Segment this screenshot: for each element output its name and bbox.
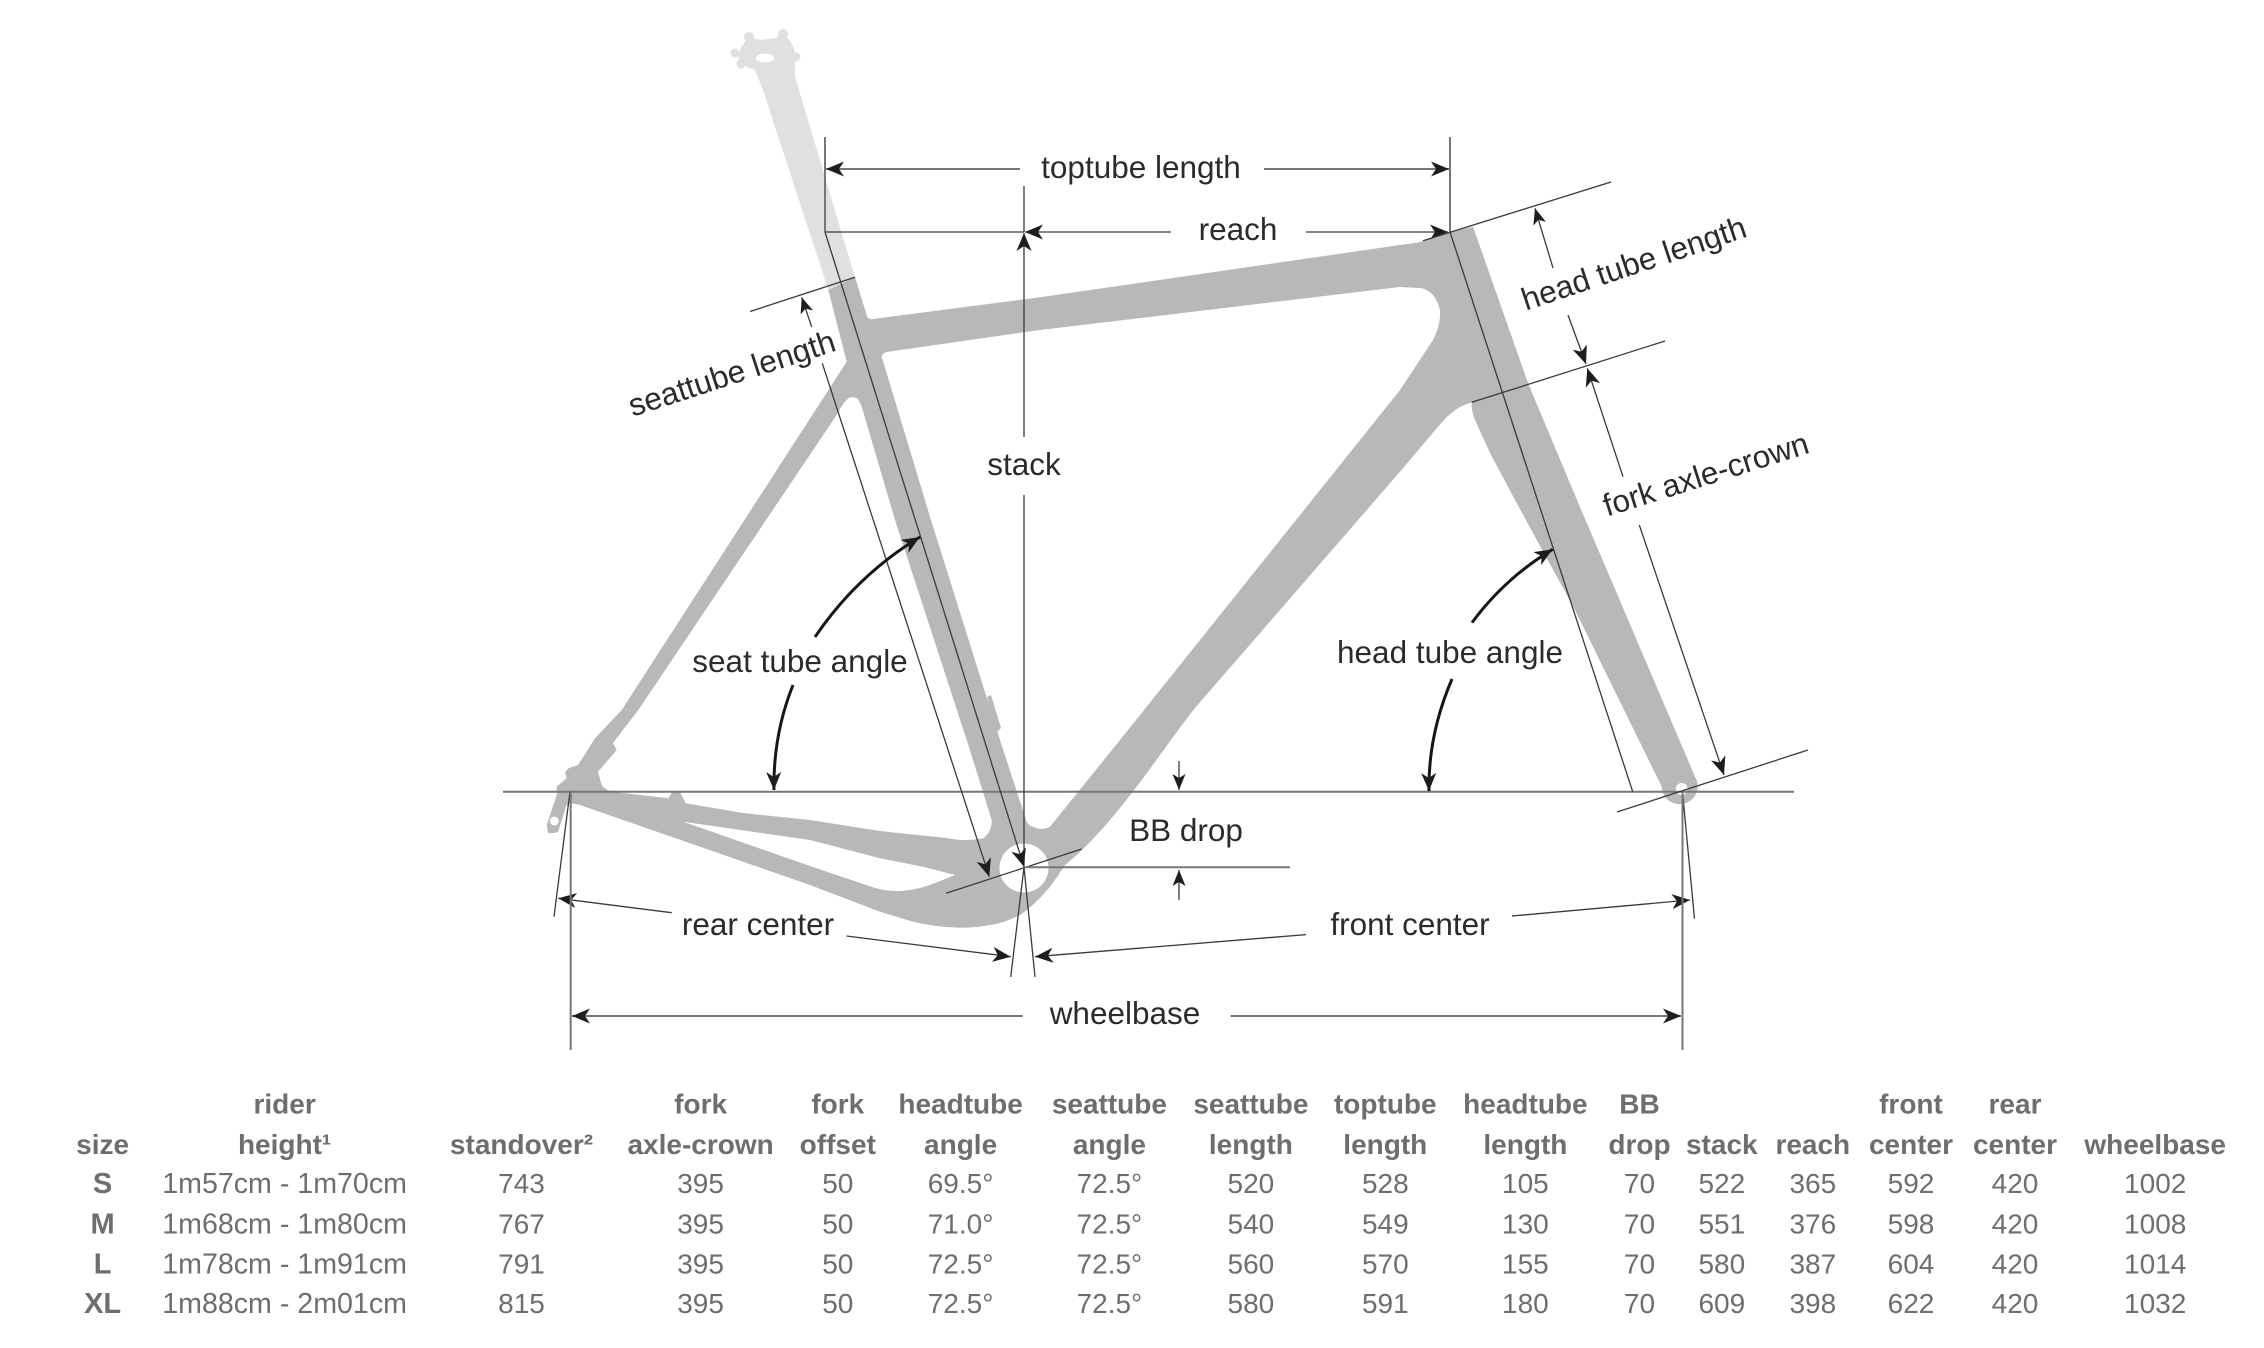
dimension: fork axle-crown: [1472, 341, 1813, 812]
row L: 560: [1228, 1248, 1274, 1279]
row M: 1008: [2124, 1209, 2186, 1240]
row S: 592: [1888, 1168, 1934, 1199]
table header: center: [1869, 1129, 1953, 1160]
row M: 420: [1992, 1209, 2038, 1240]
row L: 72.5°: [1077, 1248, 1142, 1279]
dimension: wheelbase: wheelbase: [1049, 995, 1200, 1031]
table header: length: [1343, 1129, 1427, 1160]
row M: 376: [1789, 1209, 1836, 1240]
table header: angle: [1073, 1129, 1146, 1160]
frame and fork silhouette: [547, 227, 1698, 928]
row XL: 420: [1992, 1288, 2038, 1319]
row M: 549: [1362, 1209, 1409, 1240]
table header: length: [1209, 1129, 1293, 1160]
dimension: reach: reach: [1199, 211, 1277, 247]
dimension: front center: [1024, 792, 1694, 977]
dimension: fork axle-crown: fork axle-crown: [1598, 425, 1813, 523]
row S: 1m57cm - 1m70cm: [162, 1168, 407, 1200]
table header: height¹: [238, 1129, 331, 1160]
row M: [91, 1209, 2186, 1241]
row S: 50: [822, 1168, 853, 1199]
row L: 570: [1362, 1248, 1409, 1279]
row M: 71.0°: [928, 1209, 993, 1240]
row XL: 580: [1228, 1288, 1274, 1319]
row XL: 609: [1698, 1288, 1745, 1319]
row L: 155: [1502, 1248, 1549, 1279]
dimension: toptube length: toptube length: [1041, 149, 1241, 185]
row M: 70: [1624, 1209, 1655, 1240]
row S: 395: [677, 1168, 724, 1199]
geometry table: [76, 1089, 2226, 1320]
seatpost and saddle clamp: [730, 29, 855, 290]
row M: 50: [822, 1209, 853, 1240]
row L: [94, 1248, 2186, 1280]
row L: 1014: [2124, 1248, 2186, 1279]
table header: headtube: [898, 1089, 1023, 1120]
table header: axle-crown: [627, 1129, 774, 1160]
row S: 365: [1789, 1168, 1836, 1199]
row L: L: [94, 1248, 111, 1280]
table header: center: [1973, 1129, 2057, 1160]
table header: [76, 1089, 2226, 1160]
table header: headtube: [1463, 1089, 1588, 1120]
row XL: XL: [84, 1288, 121, 1320]
table header: stack: [1686, 1129, 1758, 1160]
dimension: rear center: rear center: [682, 906, 834, 942]
table header: rear: [1989, 1089, 2042, 1120]
diagram: bicycle frame geometry: [503, 29, 1813, 1050]
dimension: head tube angle: head tube angle: [1337, 634, 1563, 670]
table header: seattube: [1193, 1089, 1308, 1120]
row L: 70: [1624, 1248, 1655, 1279]
table header: fork: [811, 1089, 865, 1120]
dimension: toptube length: [825, 137, 1450, 232]
row L: 420: [1992, 1248, 2038, 1279]
row XL: 398: [1789, 1288, 1836, 1319]
table header: wheelbase: [2083, 1129, 2226, 1160]
row M: 598: [1888, 1209, 1934, 1240]
row S: S: [93, 1168, 112, 1200]
row M: 1m68cm - 1m80cm: [162, 1209, 407, 1241]
row XL: 395: [677, 1288, 724, 1319]
row S: 70: [1624, 1168, 1655, 1199]
row S: 1002: [2124, 1168, 2186, 1199]
row L: 604: [1888, 1248, 1934, 1279]
table header: front: [1879, 1089, 1943, 1120]
dimension: seattube length: seattube length: [624, 323, 840, 423]
row XL: [84, 1288, 2186, 1320]
table header: size: [76, 1129, 129, 1160]
table header: offset: [800, 1129, 876, 1160]
row S: 528: [1362, 1168, 1409, 1199]
row XL: 622: [1888, 1288, 1934, 1319]
table header: seattube: [1052, 1089, 1167, 1120]
table header: reach: [1775, 1129, 1850, 1160]
row XL: 70: [1624, 1288, 1655, 1319]
row M: M: [91, 1209, 115, 1241]
dimension: stack: stack: [987, 446, 1061, 482]
row S: 522: [1698, 1168, 1745, 1199]
row L: 791: [498, 1248, 545, 1279]
row XL: 50: [822, 1288, 853, 1319]
dimension: BB drop: BB drop: [1129, 812, 1243, 848]
dimension: head tube length: head tube length: [1517, 209, 1751, 317]
table header: angle: [924, 1129, 997, 1160]
row XL: 1032: [2124, 1288, 2186, 1319]
table header: fork: [674, 1089, 727, 1120]
dimension: head tube length: [1423, 182, 1751, 792]
row S: 743: [498, 1168, 545, 1199]
dimension: seat tube angle: [692, 537, 920, 790]
row XL: 591: [1362, 1288, 1409, 1319]
row S: 69.5°: [928, 1168, 993, 1199]
row XL: 180: [1502, 1288, 1549, 1319]
baseline: [503, 791, 1794, 793]
table header: drop: [1608, 1129, 1671, 1160]
dimension: wheelbase: [571, 792, 1683, 1050]
row L: 580: [1698, 1248, 1745, 1279]
table header: standover²: [450, 1129, 593, 1160]
row M: 395: [677, 1209, 724, 1240]
row L: 50: [822, 1248, 853, 1279]
row L: 1m78cm - 1m91cm: [162, 1248, 407, 1280]
row M: 767: [498, 1209, 545, 1240]
row L: 395: [677, 1248, 724, 1279]
row S: 420: [1992, 1168, 2038, 1199]
row S: 72.5°: [1077, 1168, 1142, 1199]
row M: 72.5°: [1077, 1209, 1142, 1240]
row S: 105: [1502, 1168, 1549, 1199]
dimension: front center: front center: [1330, 906, 1490, 942]
dimension: head tube angle: [1337, 549, 1563, 791]
row XL: 72.5°: [928, 1288, 993, 1319]
row S: 520: [1228, 1168, 1274, 1199]
table header: toptube: [1334, 1089, 1437, 1120]
row M: 551: [1698, 1209, 1745, 1240]
row L: 72.5°: [928, 1248, 993, 1279]
frame details: [668, 695, 1001, 804]
row M: 540: [1228, 1209, 1274, 1240]
table header: length: [1483, 1129, 1567, 1160]
table header: BB: [1619, 1089, 1660, 1120]
row XL: 1m88cm - 2m01cm: [162, 1288, 407, 1320]
bottom bracket and dropout holes: [550, 783, 1688, 892]
dimension: seat tube angle: seat tube angle: [692, 643, 908, 679]
row S: [93, 1168, 2186, 1200]
row XL: 72.5°: [1077, 1288, 1142, 1319]
dimension: seattube length: [624, 232, 1024, 877]
row XL: 815: [498, 1288, 545, 1319]
row M: 130: [1502, 1209, 1549, 1240]
table header: rider: [253, 1089, 316, 1120]
dimension: BB drop: [946, 761, 1290, 900]
row L: 387: [1789, 1248, 1836, 1279]
dimension: rear center: [554, 792, 1024, 977]
